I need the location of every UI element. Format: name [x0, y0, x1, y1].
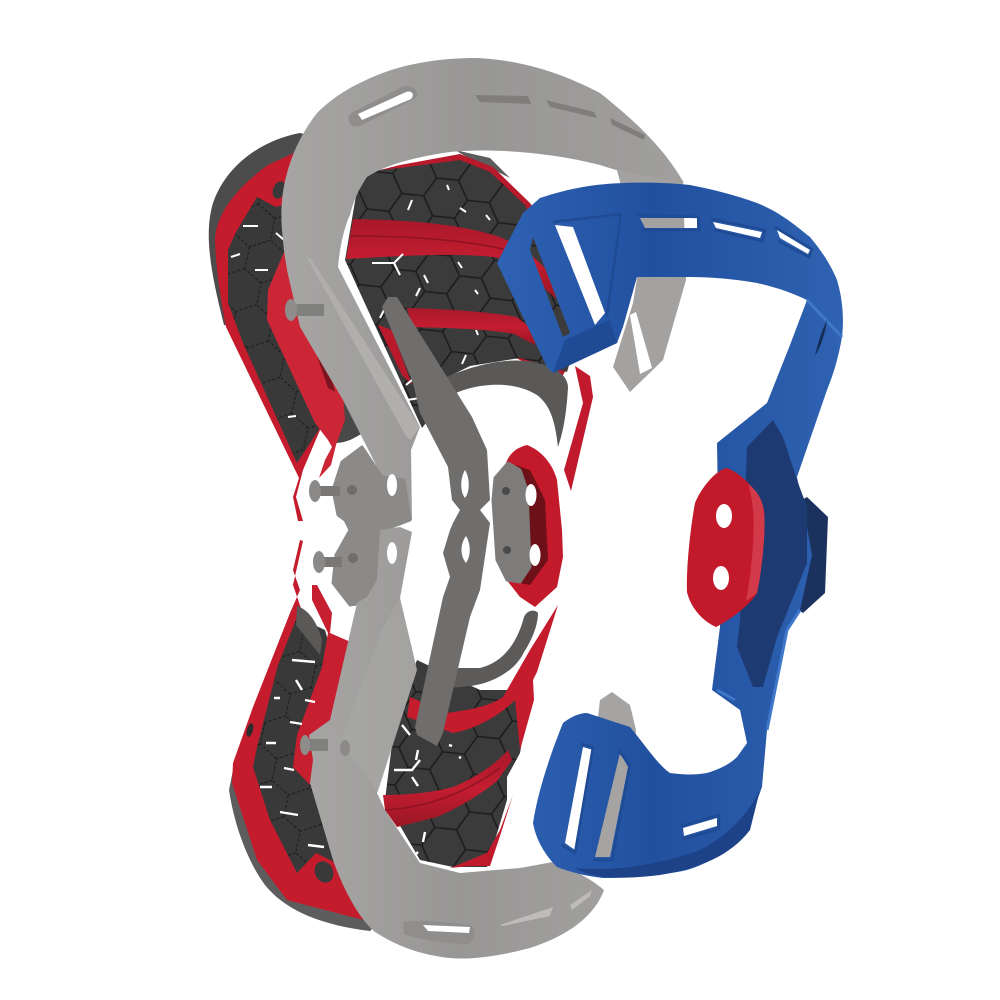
front cushion: upper hole	[716, 504, 732, 528]
grey frame: small recess three	[610, 118, 645, 140]
upper pad: right honeycomb panel	[345, 160, 575, 428]
lower pad: bottom red sliver	[450, 795, 513, 868]
upper pad: strap highlight	[350, 236, 515, 252]
hinge plate: body	[333, 447, 410, 605]
upper pad: right red sliver	[564, 366, 593, 491]
upper arm: hole	[387, 474, 397, 496]
upper pad: upper red strap	[346, 219, 561, 300]
lower pad: upper red strap	[407, 605, 558, 750]
navy rear hinge block	[785, 497, 828, 613]
front red cushion	[687, 468, 765, 627]
upper pad: right shell top red	[380, 154, 590, 380]
upper pad: left honeycomb panel	[228, 197, 335, 463]
lower slot	[403, 921, 474, 944]
upper pad: red strip behind blade	[378, 325, 412, 385]
grey frame: inner blade highlight	[306, 256, 420, 440]
upper pad	[209, 133, 593, 521]
upper pad: small oval slot	[270, 179, 288, 201]
hinge plate with pins	[285, 299, 410, 605]
grey frame: small recess one	[475, 95, 531, 104]
middle cushion: dark interior	[515, 465, 548, 585]
lower recess right	[570, 890, 592, 910]
upper pad: dark backing shell	[209, 133, 330, 330]
grey frame: upper arm and top band	[281, 58, 684, 520]
frame pin: upper	[285, 299, 324, 321]
hinge plate screw recess: upper	[347, 485, 357, 495]
lower arm: hole	[387, 542, 397, 564]
hinge pin: lower head	[313, 551, 325, 573]
grey frame: right end tab	[613, 170, 686, 392]
lower arm body	[309, 527, 604, 959]
blue frame: dark slit	[815, 320, 827, 356]
lower pad: small oval slot	[245, 722, 255, 738]
front cushion: light edge	[746, 484, 765, 601]
middle cushion: grey plate	[493, 463, 530, 582]
blue frame: slot recess shading	[553, 214, 812, 860]
middle cushion: red body	[504, 445, 563, 607]
lower pad: white gaps between hexagons	[260, 660, 461, 858]
upper pad: dark corner behind frame	[455, 150, 510, 178]
lower pad: inner left red strip	[293, 585, 353, 785]
grey frame: right end tab slot	[630, 312, 652, 374]
hinge plate screw recess: lower	[348, 553, 358, 563]
lower pad: lower red strap	[383, 750, 512, 827]
lower pad	[229, 540, 558, 931]
blue frame: main body with slots	[497, 183, 843, 878]
lower pad: oval recess	[311, 858, 337, 886]
middle cushion: grey plate screws	[502, 487, 511, 554]
centre blade: upper and lower plate	[382, 297, 490, 746]
middle hinge cushion	[493, 445, 563, 607]
upper pad: dark slot in inner strip	[304, 318, 335, 392]
grey frame: small recess two	[546, 100, 597, 118]
blue frame: underside shadow	[575, 790, 760, 878]
lower arm: light facet	[340, 598, 417, 792]
frame pin: lower	[300, 735, 328, 755]
lower pad: strap line	[385, 768, 500, 810]
upper pad: white gaps between hexagons	[231, 185, 490, 417]
upper pad: dark band under inner strip	[328, 398, 364, 443]
lower pad: right honeycomb panel	[385, 660, 532, 867]
blue frame	[497, 183, 843, 878]
front cushion: body	[687, 468, 765, 627]
hinge pin: upper head	[309, 480, 321, 502]
grey frame lower arm	[300, 474, 604, 959]
hinge pin: upper	[314, 486, 340, 496]
lower slot opening	[423, 925, 470, 933]
grey outer frame	[281, 58, 686, 520]
middle cushion: holes	[526, 484, 540, 566]
blue frame: navy hinge plate	[737, 420, 807, 687]
front cushion: lower hole	[713, 566, 729, 590]
lower pad: red outer rim	[232, 540, 385, 925]
upper pad: red outer rim	[215, 152, 320, 521]
grey tab behind lower blue frame	[590, 692, 636, 860]
grey frame: top slot	[348, 86, 417, 126]
upper pad: dark lower band	[428, 360, 568, 447]
lower recess	[500, 907, 553, 926]
upper pad: lower red strap	[407, 308, 535, 345]
lower pad: grey band	[430, 611, 538, 690]
lower pad: dark backing shell	[229, 760, 400, 931]
lower pad: dark top curl	[296, 606, 322, 655]
blue frame: lighter edge	[717, 300, 842, 730]
hinge pin: lower	[318, 557, 342, 567]
blue frame: upper-left buckle shadow	[553, 320, 617, 373]
centre blade	[382, 297, 490, 746]
upper pad: inner left red strip	[267, 247, 345, 478]
grey frame: top slot opening	[358, 92, 413, 120]
lower arm: rivet recess	[340, 740, 350, 756]
lower pad: left honeycomb panel	[253, 617, 345, 873]
